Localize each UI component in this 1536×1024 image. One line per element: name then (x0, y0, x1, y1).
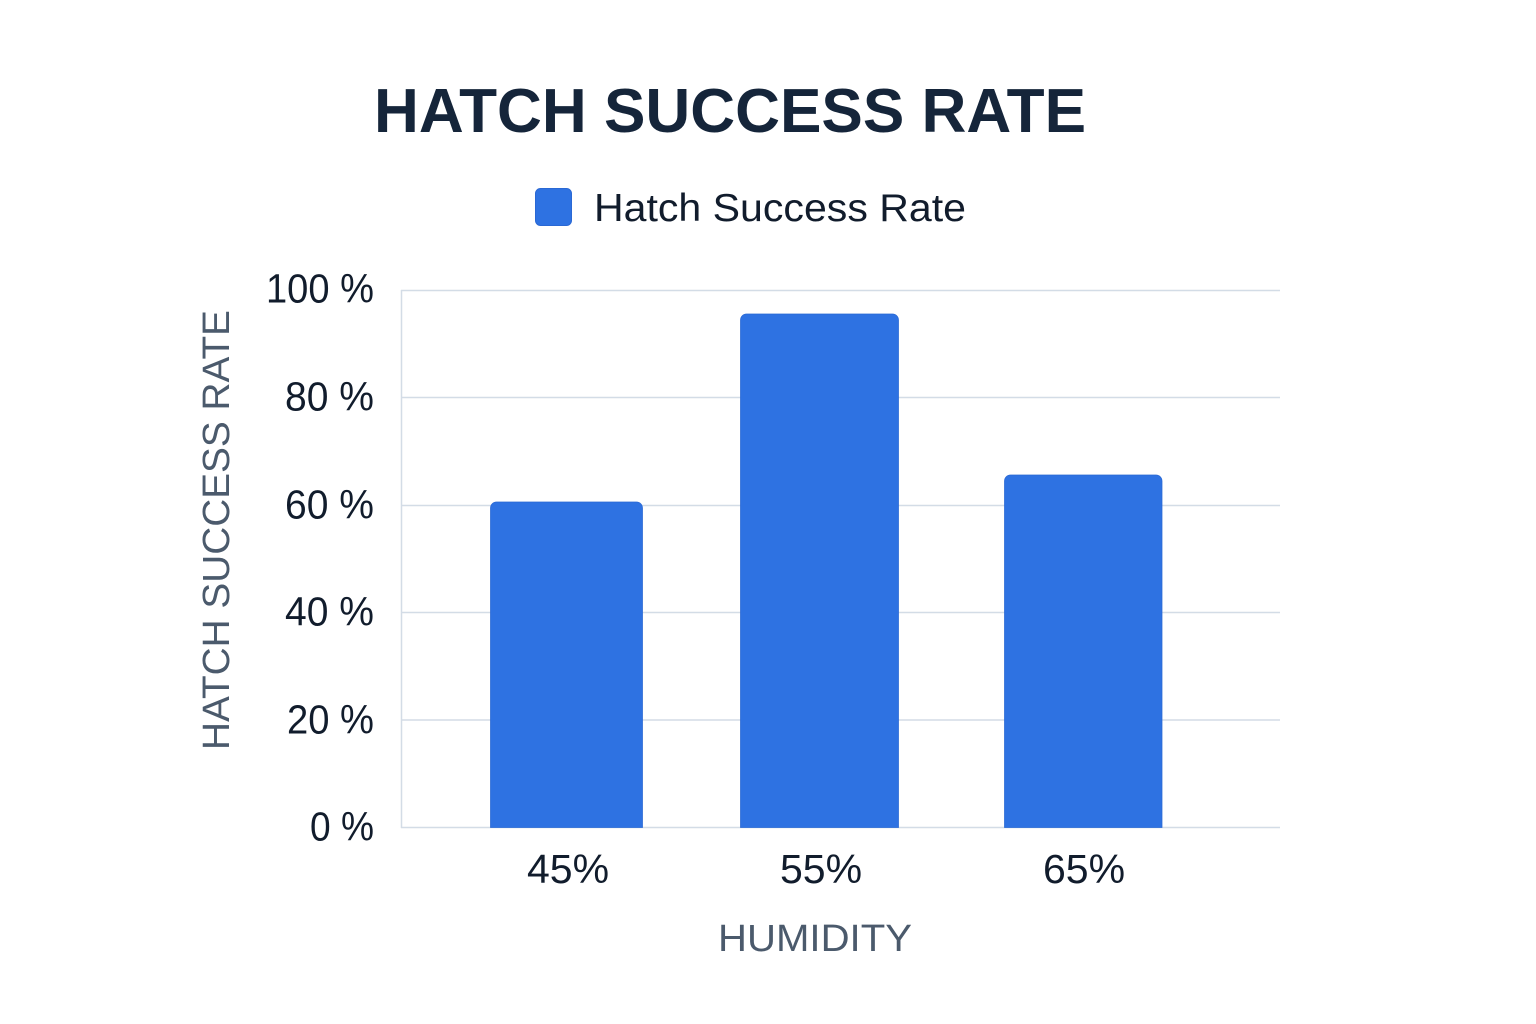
bar: 65% humidity (1004, 475, 1162, 828)
legend swatch (536, 188, 572, 226)
y-axis tick labels: 60 % (285, 482, 374, 528)
title: HATCH SUCCESS RATE (374, 77, 1086, 146)
bar: 45% humidity (490, 502, 642, 828)
y-axis tick labels: 20 % (287, 696, 374, 742)
y-axis tick labels: 0 % (310, 804, 374, 850)
x-axis tick labels (527, 846, 1125, 892)
y-axis title: HATCH SUCCESS RATE (196, 310, 238, 750)
x-axis title: HUMIDITY (718, 918, 912, 960)
bar chart (196, 266, 1280, 960)
y-axis tick labels (266, 266, 374, 850)
y-axis tick labels: 80 % (285, 374, 374, 420)
y-axis tick labels: 100 % (266, 266, 374, 312)
legend (536, 187, 966, 230)
bar: 55% humidity (740, 314, 898, 828)
legend label: Hatch Success Rate (594, 187, 966, 230)
x-axis tick labels: 65% (1043, 846, 1125, 892)
x-axis tick labels: 55% (780, 846, 862, 892)
y-axis tick labels: 40 % (285, 588, 374, 634)
x-axis tick labels: 45% (527, 846, 609, 892)
